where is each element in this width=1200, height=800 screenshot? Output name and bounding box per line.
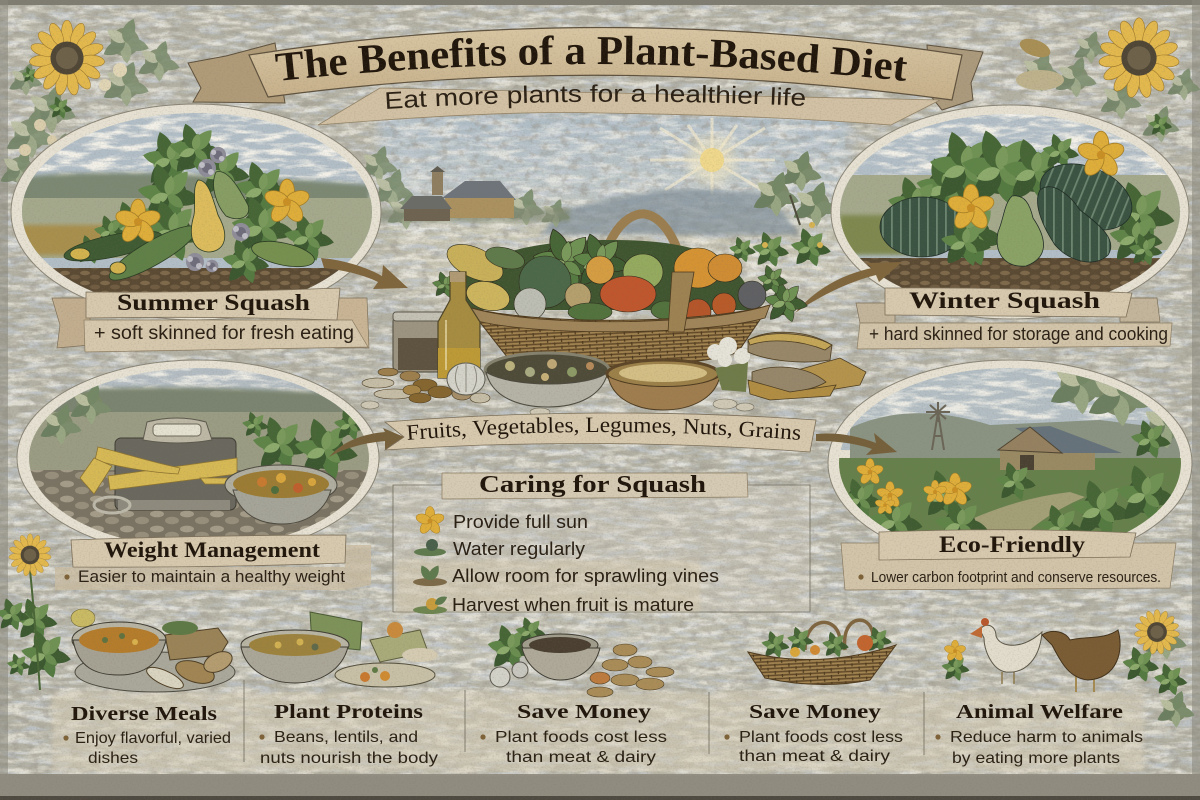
icon: vines: [413, 563, 447, 586]
spinach leaves: [38, 382, 368, 481]
panel: summer squash medallion: [0, 100, 400, 320]
column: animal welfare: Animal Welfare: [956, 701, 1123, 723]
panel: eco-friendly medallion: [828, 360, 1192, 538]
icon: sunflower top right: [1098, 18, 1180, 99]
corner foliage top right: [1016, 18, 1200, 143]
column: save money second: than meat & dairy: [739, 748, 890, 765]
icon: sunflower top left: [29, 20, 105, 96]
icon: white hen: [970, 618, 1042, 684]
column: diverse meals: Enjoy flavorful, varied: [75, 730, 231, 747]
icon: watering: [414, 539, 446, 556]
icon: brown hen: [1042, 630, 1120, 692]
column: plant proteins: Plant Proteins: [274, 701, 423, 723]
column: save money: than meat & dairy: [506, 749, 656, 766]
icon: bowl, garlic and nuts: [487, 616, 674, 697]
basket handle: [596, 214, 687, 328]
label: eco-friendly: [841, 530, 1176, 590]
panel: winter squash medallion: [830, 105, 1190, 320]
subtitle text: [385, 102, 806, 109]
arrow: weight to food groups: [329, 428, 404, 457]
label: weight management: [55, 535, 371, 590]
panel: weight management medallion: [16, 360, 380, 539]
tree: [1051, 372, 1174, 458]
icon: measuring tape: [80, 447, 237, 494]
bowl of legumes: [485, 353, 609, 407]
windmill: [926, 402, 950, 450]
right bushes: [729, 149, 840, 268]
banner: food groups: Fruits, Vegetables, Legumes, Nuts, Grains: [406, 417, 800, 440]
icon: garlic: [447, 362, 485, 395]
icon: sun: [415, 507, 445, 535]
bread and board: [748, 332, 866, 400]
column: save money: Save Money: [517, 701, 651, 723]
column: diverse meals: dishes: [88, 750, 138, 767]
panel: caring for squash: Provide full sun: [453, 512, 588, 532]
vegetable bowl: [225, 465, 337, 524]
column: animal welfare: by eating more plants: [952, 750, 1120, 767]
white flowers: [707, 337, 750, 392]
icon: vegetable basket: [748, 620, 896, 685]
garden flower: [941, 640, 970, 682]
summer squash plant: [62, 121, 335, 288]
label: weight management: Weight Management: [104, 537, 321, 562]
column: plant proteins: nuts nourish the body: [260, 750, 438, 767]
heading: Caring for Squash: [479, 472, 706, 498]
olive oil bottle: [438, 272, 480, 378]
label: eco-friendly: Eco-Friendly: [939, 532, 1086, 557]
column: save money: [480, 616, 674, 766]
central harvest still life: [361, 214, 866, 416]
bowl of grains: [607, 360, 720, 410]
arrow: food groups to eco-friendly: [816, 433, 897, 455]
small sunflower and vine, lower left: [0, 534, 95, 690]
distant trees left: [358, 144, 571, 230]
icon: sun: [650, 118, 775, 195]
icon: bathroom scale: [94, 418, 236, 513]
produce: [432, 226, 808, 325]
nuts: [362, 368, 490, 403]
icon: soup and wraps plate: [72, 621, 235, 693]
column: diverse meals: [63, 621, 235, 767]
panel: caring for squash: [393, 472, 810, 615]
column: save money second: Plant foods cost less: [739, 729, 903, 746]
title banner: Eat more plants for a healthier life: [386, 84, 805, 109]
garden rows: [848, 458, 1171, 532]
basket body: [468, 305, 770, 367]
title banner: [187, 26, 984, 126]
pebbles: [361, 399, 754, 416]
column: animal welfare: Reduce harm to animals: [950, 729, 1143, 746]
corner foliage top left: [0, 17, 181, 190]
label: winter squash: [856, 288, 1172, 349]
column: save money second: [724, 620, 903, 765]
label: summer squash: [52, 288, 369, 352]
label: eco-friendly: Lower carbon footprint and conserve resources.: [871, 569, 1161, 586]
label: winter squash: + hard skinned for storage and cooking: [869, 324, 1168, 344]
panel: caring for squash: Water regularly: [453, 539, 585, 559]
vine lower right: [1122, 609, 1196, 728]
handle base: [668, 272, 694, 332]
column: animal welfare: [935, 618, 1143, 767]
jar: [393, 312, 446, 372]
barn: [998, 426, 1122, 470]
column: save money second: Save Money: [749, 701, 881, 723]
winter squash plant: [880, 127, 1176, 268]
title banner: The Benefits of a Plant-Based Diet: [274, 35, 907, 81]
column: save money: Plant foods cost less: [495, 729, 667, 746]
label: winter squash: Winter Squash: [909, 288, 1100, 313]
icon: harvest: [413, 594, 449, 614]
icon: lentil bowl and leaf plate: [241, 612, 438, 687]
arrow: basket to winter squash: [795, 262, 902, 313]
panel: bottom strip: [52, 612, 1144, 772]
panel: caring for squash: Harvest when fruit is mature: [452, 595, 694, 615]
panel: caring for squash: Allow room for sprawling vines: [452, 566, 719, 586]
farmhouse: [400, 166, 516, 221]
title text: [277, 64, 906, 81]
column: diverse meals: Diverse Meals: [71, 703, 217, 725]
central landscape: [358, 118, 840, 268]
label: summer squash: + soft skinned for fresh eating: [94, 323, 354, 344]
label: summer squash: Summer Squash: [117, 290, 310, 315]
label: weight management: Easier to maintain a healthy weight: [78, 567, 345, 586]
arrow: summer squash to basket: [321, 258, 408, 289]
column: plant proteins: [241, 612, 438, 767]
column: plant proteins: Beans, lentils, and: [274, 729, 418, 746]
